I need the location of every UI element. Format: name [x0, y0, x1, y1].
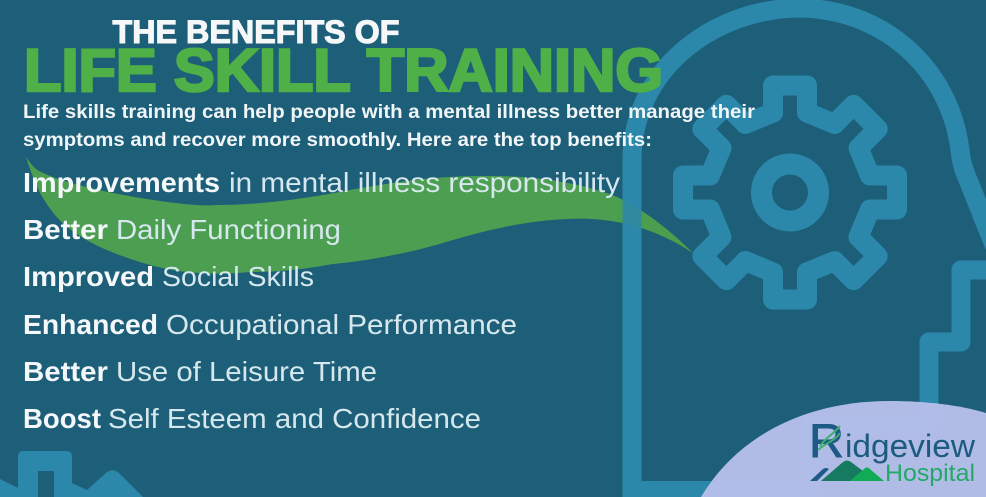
title: LIFE SKILL TRAINING: [24, 37, 663, 104]
benefit 5: Use of Leisure Time: [116, 356, 377, 387]
benefit 1: [23, 167, 620, 198]
benefits list: [23, 167, 620, 434]
benefit 2: Better: [23, 214, 108, 245]
benefit 6: Self Esteem and Confidence: [108, 403, 481, 434]
benefit 5: Better: [23, 356, 108, 387]
benefit 6: Boost: [23, 403, 101, 434]
icon: large gear: [683, 85, 897, 300]
benefit 1: Improvements: [23, 167, 220, 198]
benefit 3: Improved: [23, 261, 154, 292]
logo: Ridgeview Hospital: [809, 414, 976, 487]
benefit 3: Social Skills: [162, 261, 314, 292]
benefit 2: [23, 214, 341, 245]
icon: partial gear bottom left: [0, 451, 143, 497]
benefit 3: [23, 261, 314, 292]
benefit 4: Enhanced: [23, 309, 158, 340]
logo: Ridgeview Hospital: Hospital: [885, 460, 975, 487]
logo: Ridgeview Hospital: R: [809, 414, 844, 467]
logo backdrop circle: [701, 401, 986, 497]
benefit 4: [23, 309, 517, 340]
benefit 4: Occupational Performance: [166, 309, 517, 340]
logo: Ridgeview Hospital: idgeview: [845, 428, 976, 464]
intro text block: [23, 102, 756, 151]
green leaf swoosh: [26, 157, 693, 274]
benefit 2: Daily Functioning: [116, 214, 341, 245]
head outline icon: [622, 8, 986, 497]
intro text block: symptoms and recover more smoothly. Here are the top benefits:: [23, 130, 652, 151]
title: THE BENEFITS OF: [112, 14, 400, 50]
intro text block: Life skills training can help people with a mental illness better manage their: [23, 102, 756, 123]
benefit 1: in mental illness responsibility: [229, 167, 620, 198]
